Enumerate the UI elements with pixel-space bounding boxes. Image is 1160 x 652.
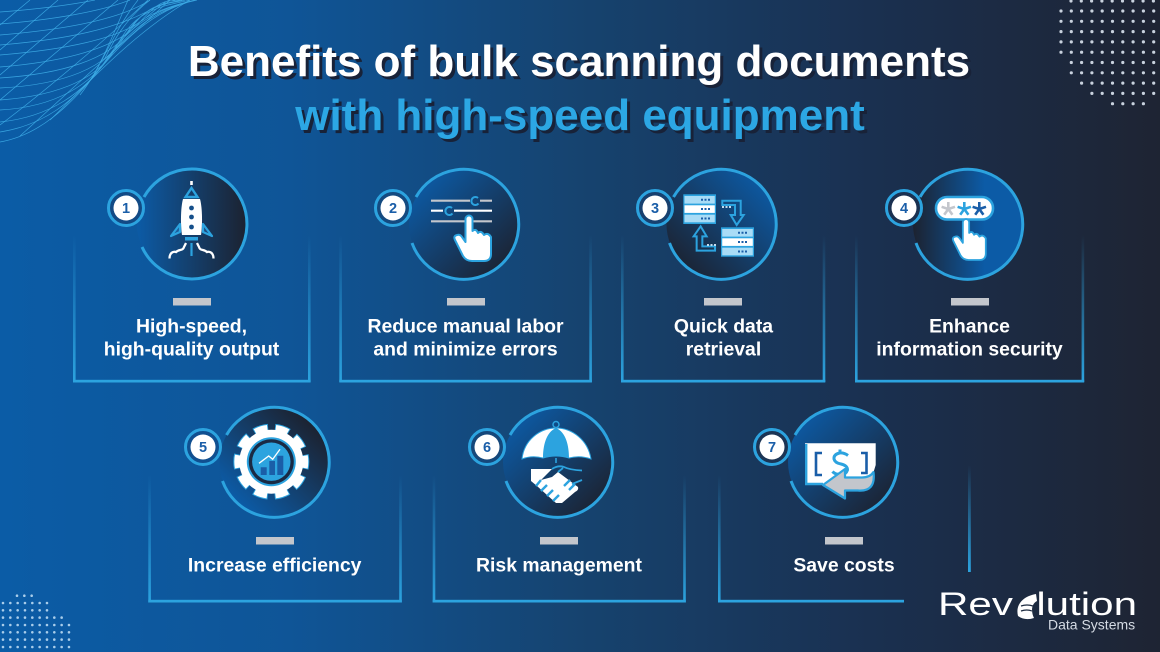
icon circle 6 bbox=[503, 407, 613, 517]
dash 5 bbox=[256, 537, 294, 544]
number badge 3 bbox=[638, 190, 672, 226]
card frame 4 bbox=[855, 235, 1084, 382]
decorative dots top right bbox=[1061, 1, 1155, 104]
card frame 2 bbox=[339, 235, 592, 382]
card frame 7 bbox=[718, 465, 971, 602]
card frame 6 bbox=[433, 475, 686, 602]
icon circle 2 bbox=[409, 169, 519, 279]
icon: password and hand bbox=[936, 197, 993, 260]
dash 6 bbox=[540, 537, 578, 544]
number badge 4 bbox=[886, 190, 922, 226]
number badge 1 bbox=[108, 190, 144, 226]
title: with high-speed equipment bbox=[294, 91, 865, 140]
icon: rocket bbox=[170, 181, 214, 258]
label 2: Reduce manual labor bbox=[367, 316, 564, 338]
number badge 5 bbox=[186, 430, 220, 464]
dash 4 bbox=[951, 298, 989, 306]
logo emblem bbox=[1013, 594, 1039, 620]
icon: gear with chart bbox=[238, 429, 304, 495]
label 5: Increase efficiency bbox=[188, 554, 362, 576]
number badge 5: 5 bbox=[199, 440, 207, 456]
number badge 7 bbox=[754, 430, 790, 464]
label 3: Quick data bbox=[674, 316, 773, 338]
number badge 2 bbox=[376, 190, 410, 226]
label 2: and minimize errors bbox=[373, 338, 558, 360]
label 4: Enhance bbox=[929, 316, 1010, 338]
label 3: retrieval bbox=[686, 338, 761, 360]
panel: 1 high-speed output bbox=[73, 169, 311, 382]
number badge 7: 7 bbox=[768, 440, 776, 456]
dash 2 bbox=[447, 298, 485, 306]
title: Benefits of bulk scanning documents bbox=[188, 37, 970, 86]
icon circle 3 bbox=[666, 169, 776, 279]
card frame 5 bbox=[148, 475, 402, 602]
logo: Revolution bbox=[938, 586, 1137, 622]
logo: Data Systems bbox=[1048, 616, 1135, 632]
icon circle 1 bbox=[137, 169, 247, 279]
panel: 6 risk management bbox=[433, 407, 686, 602]
number badge 6: 6 bbox=[483, 440, 491, 456]
panel: 4 enhance information security bbox=[855, 169, 1084, 382]
label 4: information security bbox=[876, 338, 1063, 360]
decorative wave mesh bbox=[0, 0, 197, 142]
number badge 1: 1 bbox=[122, 201, 130, 217]
icon: sliders and hand bbox=[431, 197, 492, 261]
title bbox=[188, 37, 970, 140]
label 1: High-speed, bbox=[136, 316, 247, 338]
dash 1 bbox=[173, 298, 211, 306]
label 1: high-quality output bbox=[104, 338, 280, 360]
label 6: Risk management bbox=[476, 554, 643, 576]
icon: servers with arrows bbox=[683, 194, 754, 257]
panel: 7 save costs bbox=[718, 407, 971, 602]
panel: 5 increase efficiency bbox=[148, 407, 402, 602]
label 7: Save costs bbox=[793, 554, 895, 576]
dash 7 bbox=[825, 537, 863, 544]
icon: bill with return arrow bbox=[805, 443, 876, 498]
icon circle 5 bbox=[220, 407, 330, 517]
decorative dots bottom left bbox=[3, 596, 69, 647]
logo bbox=[938, 586, 1137, 632]
panel: 3 quick data retrieval bbox=[621, 169, 825, 382]
card frame 3 bbox=[621, 235, 825, 382]
number badge 6 bbox=[470, 430, 504, 464]
card frame 1 bbox=[73, 235, 311, 382]
number badge 4: 4 bbox=[900, 201, 908, 217]
icon circle 4 bbox=[913, 169, 1023, 279]
number badge 3: 3 bbox=[651, 201, 659, 217]
icon: umbrella and handshake bbox=[522, 422, 591, 503]
number badge 2: 2 bbox=[389, 201, 397, 217]
dash 3 bbox=[704, 298, 742, 306]
panel: 2 reduce manual labor bbox=[339, 169, 592, 382]
icon circle 7 bbox=[788, 407, 898, 517]
